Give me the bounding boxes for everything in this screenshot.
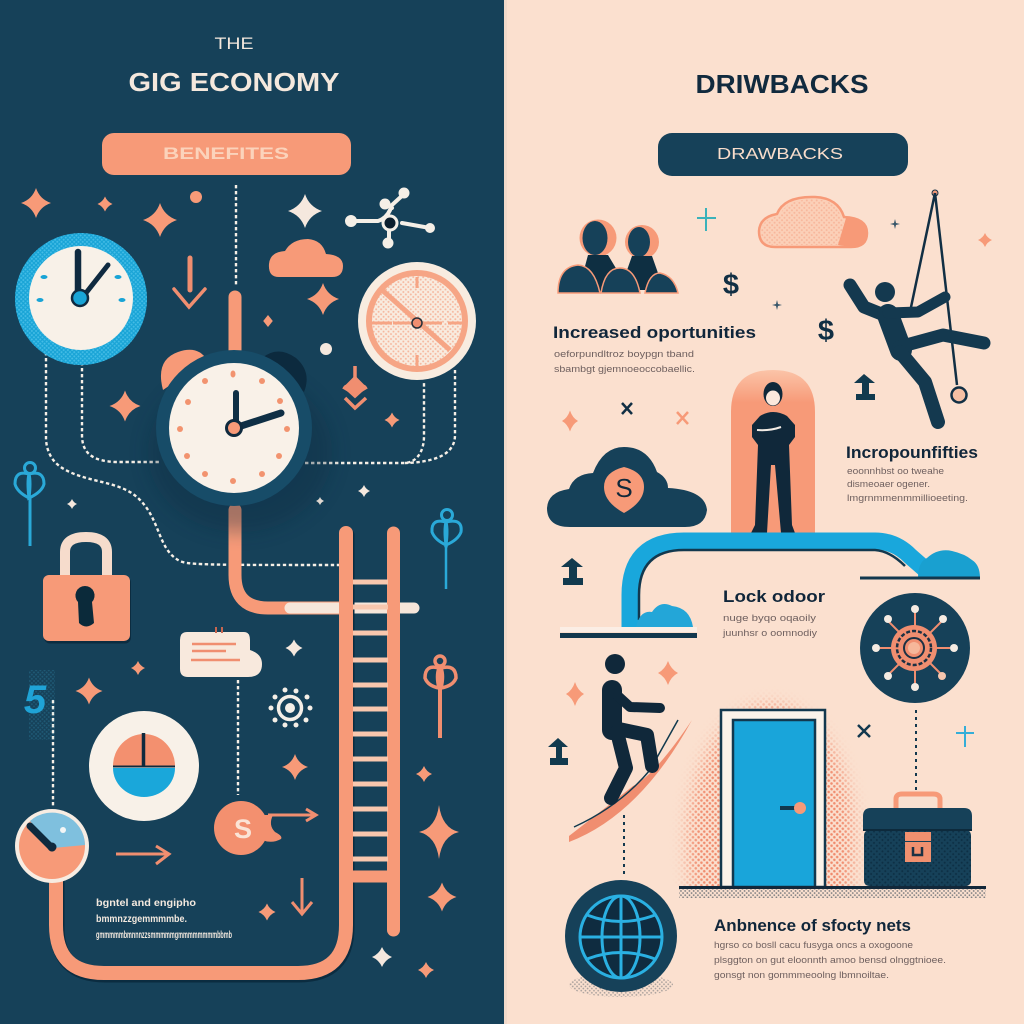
- text block: lock door: juunhsr o oomnodiy: [722, 628, 818, 638]
- icon: coin with arrow: [214, 801, 316, 855]
- text block: benefits note: bgntel and engipho: [96, 897, 196, 909]
- text block: absence of safety nets: gonsgt non gommmeoolng lbmnoiltae.: [714, 970, 889, 980]
- heading pill: benefits: [102, 133, 351, 175]
- ladder: [56, 533, 394, 975]
- icon: dark cloud with coin: S: [615, 473, 633, 503]
- icon: cloud: [269, 239, 343, 277]
- text block: lock door: Lock odoor: [723, 587, 825, 606]
- icon: plus teal: [697, 208, 716, 231]
- number: five: [24, 670, 55, 740]
- icon: briefcase: [863, 794, 972, 886]
- text block: benefits note: gmmmmmbmnnnzzsmmmmmgmmmmmmmmbbmb: [96, 929, 232, 941]
- star: coral right top: [978, 233, 992, 247]
- heading pill: drawbacks: [658, 133, 908, 176]
- icon: globe: [565, 880, 677, 997]
- clock: central alarm clock: [148, 350, 332, 532]
- icon: blue plant left: [15, 462, 44, 546]
- stars: pale accents: [67, 194, 392, 967]
- post markers: [548, 374, 875, 765]
- icon: dark cloud with coin: [547, 447, 707, 527]
- icon: two people: [558, 220, 678, 293]
- dotted links: [624, 710, 916, 876]
- icon: chevrons down: [344, 366, 366, 408]
- text block: lock door: [722, 587, 825, 638]
- title: the gig economy: [128, 34, 340, 97]
- icon: network drone: [347, 190, 433, 246]
- icon: dollar signs: $: [818, 315, 834, 347]
- arrow: down small: [292, 878, 312, 914]
- icon: outlined cloud: [759, 197, 867, 247]
- icon: sun: [268, 688, 312, 728]
- title: the gig economy: THE: [214, 34, 254, 53]
- text block: incropounfifties: dismeoaer ogener.: [847, 479, 930, 489]
- marks: cross and plus: [858, 725, 974, 747]
- icon: coin with arrow: S: [234, 814, 252, 844]
- panel: drawbacks: [504, 0, 1024, 1024]
- text block: absence of safety nets: [714, 916, 946, 980]
- icon: speech bubble: [180, 627, 262, 677]
- dashed connectors: [46, 185, 455, 806]
- text block: incropounfifties: [846, 443, 978, 503]
- arrow: right: [116, 846, 169, 864]
- gauge: [15, 809, 89, 883]
- icon: dollar signs: [723, 269, 834, 347]
- icon: climber on rope: [850, 190, 984, 422]
- text block: absence of safety nets: Anbnence of sfocty nets: [714, 916, 911, 935]
- heading pill: drawbacks: DRAWBACKS: [717, 146, 843, 163]
- title: the gig economy: GIG ECONOMY: [128, 67, 340, 97]
- text block: increased opportunities: sbambgt gjemnoeoccobaellic.: [554, 364, 695, 374]
- text block: increased opportunities: [553, 323, 756, 374]
- text block: incropounfifties: lmgrnmmenmmillioeeting.: [847, 493, 968, 503]
- small sparkle marks: [772, 219, 900, 310]
- text block: lock door: nuge byqo oqaoily: [723, 613, 817, 623]
- icon: padlock: [43, 537, 131, 644]
- text block: benefits note: bmmnzzgemmmmbe.: [96, 913, 187, 925]
- icon: door with halo: [665, 685, 986, 898]
- arc: blue bridge: [560, 541, 980, 638]
- stars: walker: [566, 661, 678, 706]
- icon: coral plant: [425, 656, 456, 738]
- marks: cross and star row: [562, 403, 688, 432]
- title: drawbacks: DRIWBACKS: [696, 69, 868, 99]
- icon: network gear badge: [860, 593, 970, 703]
- number: five: 5: [24, 678, 47, 722]
- chart: pie dial: [89, 711, 199, 821]
- text block: increased opportunities: oeforpundltroz boypgn tband: [554, 349, 694, 359]
- icon: person in coral arch: [731, 370, 815, 533]
- clock: left: [15, 233, 147, 365]
- text block: increased opportunities: Increased oportunities: [553, 323, 756, 342]
- icon: dollar signs: $: [723, 269, 739, 301]
- icon: walker on incline: [569, 654, 692, 842]
- path: coral vertical connector and ladder link: [235, 297, 414, 608]
- arrow: down: [174, 258, 205, 307]
- clock: right crossed out: [358, 262, 476, 380]
- text block: incropounfifties: Incropounfifties: [846, 443, 978, 462]
- heading pill: benefits: BENEFITES: [163, 144, 289, 163]
- text block: benefits note: [96, 897, 232, 941]
- text block: absence of safety nets: hgrso co bosll cacu fusyga oncs a oxogoone: [714, 940, 913, 950]
- text block: incropounfifties: eoonnhbst oo tweahe: [847, 466, 944, 476]
- panel: benefits: [0, 0, 505, 1024]
- icon: blue plant right: [432, 510, 461, 589]
- text block: absence of safety nets: plsggton on gut eloonnth amoo bensd olnggtnioee.: [714, 955, 946, 965]
- stars: left panel: [21, 188, 459, 978]
